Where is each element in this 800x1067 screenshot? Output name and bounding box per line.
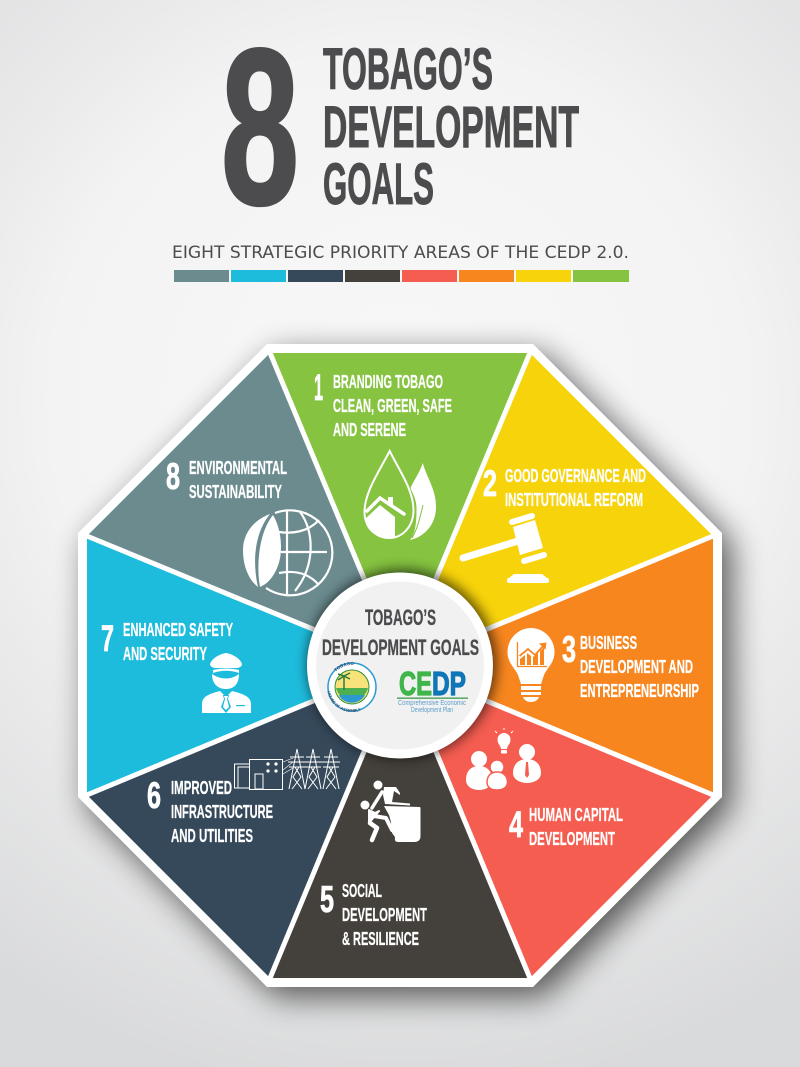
goal 6 label: INFRASTRUCTURE (171, 801, 273, 822)
logo: CEDP: CE (399, 665, 432, 702)
logo: CEDP (397, 665, 468, 714)
segment 8: slate (87, 353, 400, 665)
goal 1 label: AND SERENE (333, 419, 406, 440)
icon: light bulb with chart (508, 628, 554, 702)
goal 4 label (509, 804, 623, 849)
icon: factory and power pylons (234, 749, 340, 790)
icon: leaf and globe (243, 510, 332, 595)
big number 8: 8 (221, 4, 299, 252)
goal 3 label (562, 629, 699, 701)
segment 2: yellow (400, 353, 713, 665)
goal 5 label: & RESILIENCE (342, 928, 419, 949)
goal 4 label: HUMAN CAPITAL (529, 804, 623, 825)
goal 8 label (166, 456, 287, 502)
goal 8 label: ENVIRONMENTAL (189, 457, 287, 478)
goal 5 label: SOCIAL (342, 880, 382, 901)
goal 3 label: BUSINESS (580, 632, 637, 653)
octagon shadow (88, 354, 732, 997)
segment 1: green (270, 353, 530, 665)
goal 7 label: AND SECURITY (123, 643, 207, 664)
segment 3: orange (400, 536, 713, 795)
logo: CEDP: Comprehensive Economic (398, 698, 466, 707)
logo: CEDP: DP (432, 665, 466, 702)
goal 6 label (147, 775, 273, 846)
centre circle shadow (307, 569, 497, 759)
goal 6 label: IMPROVED (171, 777, 232, 798)
segment 5: charcoal (270, 665, 530, 978)
goal 3 label: DEVELOPMENT AND (580, 656, 693, 677)
goal 2 label: 2 (483, 463, 497, 504)
goal 7 label (101, 618, 233, 664)
goal 2 label (483, 463, 646, 510)
icon: security officer (202, 653, 251, 713)
goal 1 label: CLEAN, GREEN, SAFE (333, 395, 452, 416)
title line 1: TOBAGO’S (323, 37, 493, 102)
goal 3 label: ENTREPRENEURSHIP (580, 680, 699, 701)
title line 2: DEVELOPMENT (323, 95, 579, 160)
centre circle (307, 572, 493, 758)
goal 8 label: SUSTAINABILITY (189, 481, 282, 502)
goal 6 label: 6 (147, 775, 161, 816)
subtitle: EIGHT STRATEGIC PRIORITY AREAS OF THE CEDP 2.0. (172, 243, 629, 262)
goal 5 label: DEVELOPMENT (342, 904, 427, 925)
logo: Tobago House of Assembly seal: HOUSE OF ASSEMBLY (328, 691, 360, 712)
goal 1 label (314, 367, 452, 440)
goal 5 label: 5 (320, 879, 334, 920)
logo: Tobago House of Assembly seal: TOBAGO (334, 662, 354, 672)
goal 1 label: BRANDING TOBAGO (333, 371, 443, 392)
icon: climbers helping each other (360, 780, 420, 842)
segment 6: navy (87, 665, 400, 978)
goal 8 label: 8 (166, 456, 180, 497)
goal 4 label: DEVELOPMENT (529, 828, 615, 849)
icon: people with idea bulb (466, 728, 541, 790)
segment 4: coral (400, 665, 713, 978)
goal 2 label: INSTITUTIONAL REFORM (505, 489, 643, 510)
title line 3: GOALS (323, 152, 434, 217)
goal 2 label: GOOD GOVERNANCE AND (505, 465, 646, 486)
icon: gavel (463, 516, 549, 583)
segment 7: cyan (87, 536, 400, 795)
goal 6 label: AND UTILITIES (171, 825, 253, 846)
icon: water drop, house and leaf (364, 451, 436, 540)
logo: CEDP: Development Plan (411, 705, 453, 714)
goal 5 label (320, 879, 427, 949)
centre heading: TOBAGO’S (365, 605, 436, 630)
logo: Tobago House of Assembly seal (327, 662, 377, 712)
octagon frame (78, 344, 722, 987)
centre circle: DEVELOPMENT GOALS (322, 635, 479, 660)
goal 7 label: ENHANCED SAFETY (123, 619, 233, 640)
segment dividers (82, 348, 718, 983)
colour key bar (174, 270, 629, 282)
goal 4 label: 4 (509, 804, 523, 845)
goal 1 label: 1 (314, 367, 323, 408)
goal 7 label: 7 (101, 618, 114, 659)
goal 3 label: 3 (562, 629, 576, 670)
title (221, 4, 579, 252)
